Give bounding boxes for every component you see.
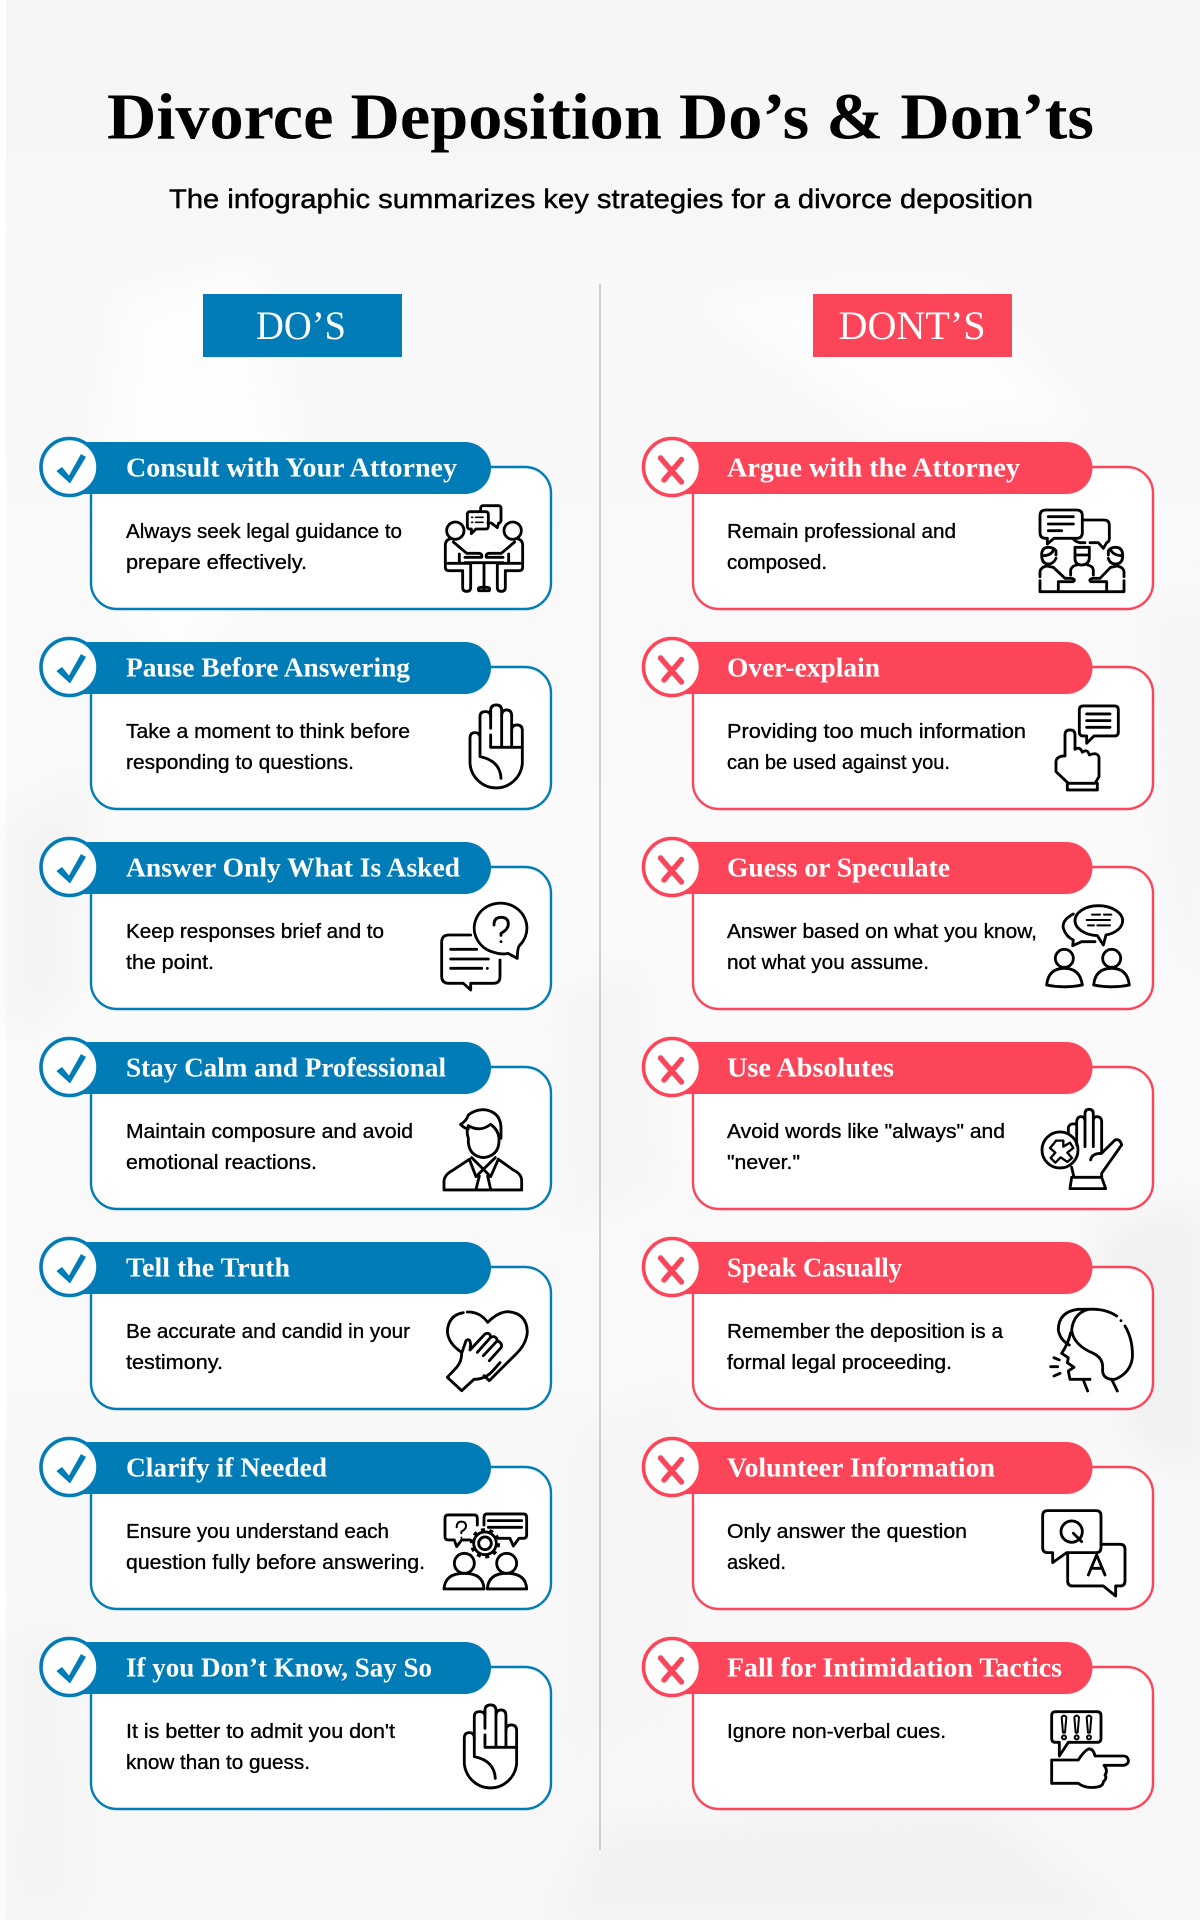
card: answer only what is asked	[41, 838, 551, 1009]
card body	[91, 1067, 551, 1209]
card text	[126, 720, 410, 774]
card: pause before answering	[41, 638, 551, 809]
card text	[727, 1320, 1004, 1374]
icon: cross badge	[644, 1438, 700, 1496]
icon: cross badge	[644, 1238, 700, 1296]
card: guess or speculate	[644, 838, 1153, 1009]
icon: check badge	[41, 1038, 98, 1096]
card text	[126, 920, 384, 974]
card text: Always seek legal guidance to	[126, 520, 402, 543]
icon: two people with gear and bubbles	[444, 1514, 527, 1589]
card heading: Use Absolutes	[727, 1052, 894, 1082]
icon: check badge	[41, 838, 98, 896]
icon: cross badge	[644, 1638, 700, 1696]
card text	[126, 1320, 410, 1374]
card text	[727, 520, 956, 574]
title pill	[670, 1242, 1093, 1294]
icon: pointing finger with speech bubble	[1056, 706, 1118, 790]
card text: not what you assume.	[727, 951, 929, 974]
card: volunteer information	[644, 1438, 1153, 1609]
card heading: Volunteer Information	[727, 1452, 995, 1482]
card text: Keep responses brief and to	[126, 920, 384, 943]
card: if you don't know, say so	[41, 1638, 551, 1809]
card body	[91, 467, 551, 609]
card: tell the truth	[41, 1238, 551, 1409]
card heading: Stay Calm and Professional	[126, 1052, 446, 1082]
icon: question and answer bubbles	[1043, 1511, 1125, 1596]
card heading: Guess or Speculate	[727, 852, 950, 882]
card text: It is better to admit you don't	[126, 1720, 395, 1743]
card heading: If you Don’t Know, Say So	[126, 1652, 432, 1682]
icon: speaking head	[1051, 1309, 1132, 1391]
card body	[693, 1267, 1153, 1409]
icon: check badge	[41, 638, 98, 696]
card body	[693, 467, 1153, 609]
icon: check badge	[41, 438, 98, 496]
card: clarify if needed	[41, 1438, 551, 1609]
icon: pointing hand with exclamation bubble	[1052, 1712, 1128, 1787]
card text: Answer based on what you know,	[727, 920, 1037, 943]
card text: "never."	[727, 1151, 800, 1174]
icon: question speech bubbles	[442, 903, 527, 990]
title pill	[670, 442, 1093, 494]
card text	[126, 520, 402, 574]
card text: testimony.	[126, 1351, 223, 1374]
card text: can be used against you.	[727, 751, 950, 774]
card: fall for intimidation tactics	[644, 1638, 1153, 1809]
card text: composed.	[727, 551, 827, 574]
card text: question fully before answering.	[126, 1551, 425, 1574]
card body	[91, 667, 551, 809]
icon: man in suit	[444, 1110, 522, 1190]
card: use absolutes	[644, 1038, 1153, 1209]
card heading: Argue with the Attorney	[727, 452, 1021, 482]
icon: hand with cross	[1042, 1109, 1122, 1189]
icon: people at table	[445, 506, 523, 591]
card body	[91, 1267, 551, 1409]
card heading: Consult with Your Attorney	[126, 452, 458, 482]
heading: don'ts	[813, 294, 1012, 357]
card: speak casually	[644, 1238, 1153, 1409]
card body	[693, 1067, 1153, 1209]
icon: cross badge	[644, 1038, 700, 1096]
title pill	[70, 642, 491, 694]
title: Divorce Deposition Do’s & Don’ts	[107, 80, 1094, 154]
card body	[693, 1667, 1153, 1809]
card heading: Answer Only What Is Asked	[126, 852, 460, 882]
title pill	[70, 1442, 491, 1494]
card heading: Tell the Truth	[126, 1252, 290, 1282]
title pill	[670, 642, 1093, 694]
icon: two people talking	[1047, 906, 1129, 987]
card text: Ignore non-verbal cues.	[727, 1720, 946, 1743]
icon: raised hand	[464, 1705, 517, 1788]
icon: cross badge	[644, 838, 700, 896]
title pill	[70, 1242, 491, 1294]
card body	[91, 1467, 551, 1609]
card text: responding to questions.	[126, 751, 354, 774]
card text: Avoid words like "always" and	[727, 1120, 1005, 1143]
card text	[126, 1720, 395, 1774]
card: stay calm and professional	[41, 1038, 551, 1209]
title pill	[70, 442, 491, 494]
card text: Only answer the question	[727, 1520, 967, 1543]
icon: cross badge	[644, 638, 700, 696]
card text	[727, 720, 1026, 774]
card body	[693, 867, 1153, 1009]
card body	[91, 1667, 551, 1809]
card heading: Pause Before Answering	[126, 652, 411, 682]
card body	[91, 867, 551, 1009]
card text	[126, 1120, 413, 1174]
card text: know than to guess.	[126, 1751, 310, 1774]
card text	[727, 1520, 967, 1574]
title pill	[70, 842, 491, 894]
column divider	[600, 284, 601, 1850]
title pill	[670, 1642, 1093, 1694]
card text: Take a moment to think before	[126, 720, 410, 743]
card heading: Over-explain	[727, 652, 880, 682]
card body	[693, 1467, 1153, 1609]
card: consult with your attorney	[41, 438, 551, 609]
card text: prepare effectively.	[126, 551, 307, 574]
card text: Remain professional and	[727, 520, 956, 543]
icon: check badge	[41, 1238, 98, 1296]
card heading: Clarify if Needed	[126, 1452, 327, 1482]
icon: check badge	[41, 1438, 98, 1496]
heading: don'ts: DONT’S	[838, 303, 986, 348]
heading: do's: DO’S	[256, 303, 346, 348]
card heading: Speak Casually	[727, 1252, 902, 1282]
card text	[126, 1520, 425, 1574]
card text: Ensure you understand each	[126, 1520, 389, 1543]
title pill	[70, 1042, 491, 1094]
icon: check badge	[41, 1638, 98, 1696]
card: argue with the attorney	[644, 438, 1153, 609]
subtitle: The infographic summarizes key strategies for a divorce deposition	[169, 184, 1033, 214]
icon: raised hand	[470, 705, 522, 788]
card text: Providing too much information	[727, 720, 1026, 743]
card text: the point.	[126, 951, 214, 974]
title pill	[670, 1042, 1093, 1094]
card: over-explain	[644, 638, 1153, 809]
card text: Be accurate and candid in your	[126, 1320, 410, 1343]
title pill	[670, 1442, 1093, 1494]
card heading: Fall for Intimidation Tactics	[727, 1652, 1062, 1682]
title pill	[70, 1642, 491, 1694]
card body	[693, 667, 1153, 809]
card text: asked.	[727, 1551, 786, 1574]
icon: hand on heart	[447, 1312, 527, 1391]
card text	[727, 1120, 1005, 1174]
card text: Remember the deposition is a	[727, 1320, 1004, 1343]
heading: do's	[203, 294, 402, 357]
card text: formal legal proceeding.	[727, 1351, 952, 1374]
title pill	[670, 842, 1093, 894]
card text	[727, 920, 1037, 974]
card text: Maintain composure and avoid	[126, 1120, 413, 1143]
icon: cross badge	[644, 438, 700, 496]
icon: group discussion	[1040, 510, 1124, 592]
card text: emotional reactions.	[126, 1151, 317, 1174]
